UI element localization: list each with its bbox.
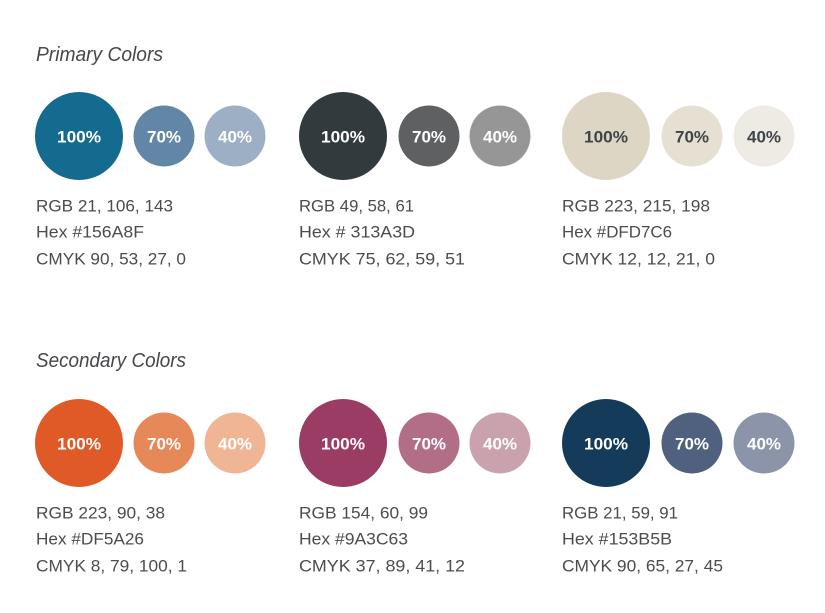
- swatch circles: plum: 70%: [412, 436, 446, 454]
- swatch circles: blue: 40%: [218, 128, 252, 146]
- swatch circles: charcoal: 40%: [483, 128, 517, 146]
- colour values: sand: [562, 196, 715, 268]
- swatch circles: charcoal: 100%: [321, 128, 365, 146]
- colour values: charcoal: CMYK 75, 62, 59, 51: [299, 250, 465, 268]
- swatch circles: navy: 100%: [584, 436, 628, 454]
- colour values: navy: [562, 504, 723, 576]
- swatch circles: blue: [35, 92, 266, 180]
- panel: secondary orange swatch: [35, 399, 266, 576]
- heading: secondary colors: Secondary Colors: [36, 350, 186, 372]
- swatch circles: blue: 70%: [147, 128, 181, 146]
- heading: primary colors: Primary Colors: [36, 44, 163, 66]
- swatch circles: orange: 100%: [57, 436, 101, 454]
- colour values: charcoal: RGB 49, 58, 61: [299, 196, 414, 216]
- colour values: sand: Hex #DFD7C6: [562, 222, 672, 242]
- swatch circles: sand: 70%: [675, 128, 709, 146]
- swatch circles: sand: [562, 92, 794, 180]
- colour values: charcoal: [299, 196, 465, 268]
- colour values: navy: RGB 21, 59, 91: [562, 504, 678, 522]
- panel: primary blue swatch: [35, 92, 266, 268]
- swatch circles: orange: 40%: [218, 436, 252, 454]
- swatch circles: navy: 40%: [747, 436, 781, 454]
- colour values: orange: CMYK 8, 79, 100, 1: [36, 556, 187, 576]
- swatch circles: navy: [562, 399, 794, 487]
- colour values: blue: Hex #156A8F: [36, 222, 144, 242]
- colour values: plum: Hex #9A3C63: [299, 530, 408, 548]
- panel: primary charcoal swatch: [299, 92, 530, 268]
- swatch circles: navy: 70%: [675, 436, 709, 454]
- colour values: blue: CMYK 90, 53, 27, 0: [36, 250, 186, 268]
- colour values: blue: RGB 21, 106, 143: [36, 196, 173, 216]
- colour values: plum: RGB 154, 60, 99: [299, 504, 428, 522]
- colour values: sand: CMYK 12, 12, 21, 0: [562, 250, 715, 268]
- colour values: orange: Hex #DF5A26: [36, 530, 144, 548]
- colour values: navy: CMYK 90, 65, 27, 45: [562, 556, 723, 576]
- colour values: plum: [299, 504, 465, 576]
- swatch circles: plum: 40%: [483, 436, 517, 454]
- panel: secondary navy swatch: [562, 399, 794, 576]
- swatch circles: orange: [35, 399, 266, 487]
- colour values: blue: [36, 196, 186, 268]
- colour values: sand: RGB 223, 215, 198: [562, 196, 710, 216]
- swatch circles: charcoal: [299, 92, 530, 180]
- colour values: charcoal: Hex # 313A3D: [299, 222, 415, 242]
- swatch circles: sand: 100%: [584, 128, 628, 146]
- swatch circles: sand: 40%: [747, 128, 781, 146]
- colour values: navy: Hex #153B5B: [562, 530, 672, 548]
- swatch circles: blue: 100%: [57, 128, 101, 146]
- colour values: plum: CMYK 37, 89, 41, 12: [299, 556, 465, 576]
- panel: secondary plum swatch: [299, 399, 530, 576]
- swatch circles: plum: 100%: [321, 436, 365, 454]
- swatch circles: plum: [299, 399, 530, 487]
- swatch circles: charcoal: 70%: [412, 128, 446, 146]
- swatch circles: orange: 70%: [147, 436, 181, 454]
- panel: primary sand swatch: [562, 92, 794, 268]
- colour values: orange: [36, 504, 187, 576]
- colour values: orange: RGB 223, 90, 38: [36, 504, 165, 522]
